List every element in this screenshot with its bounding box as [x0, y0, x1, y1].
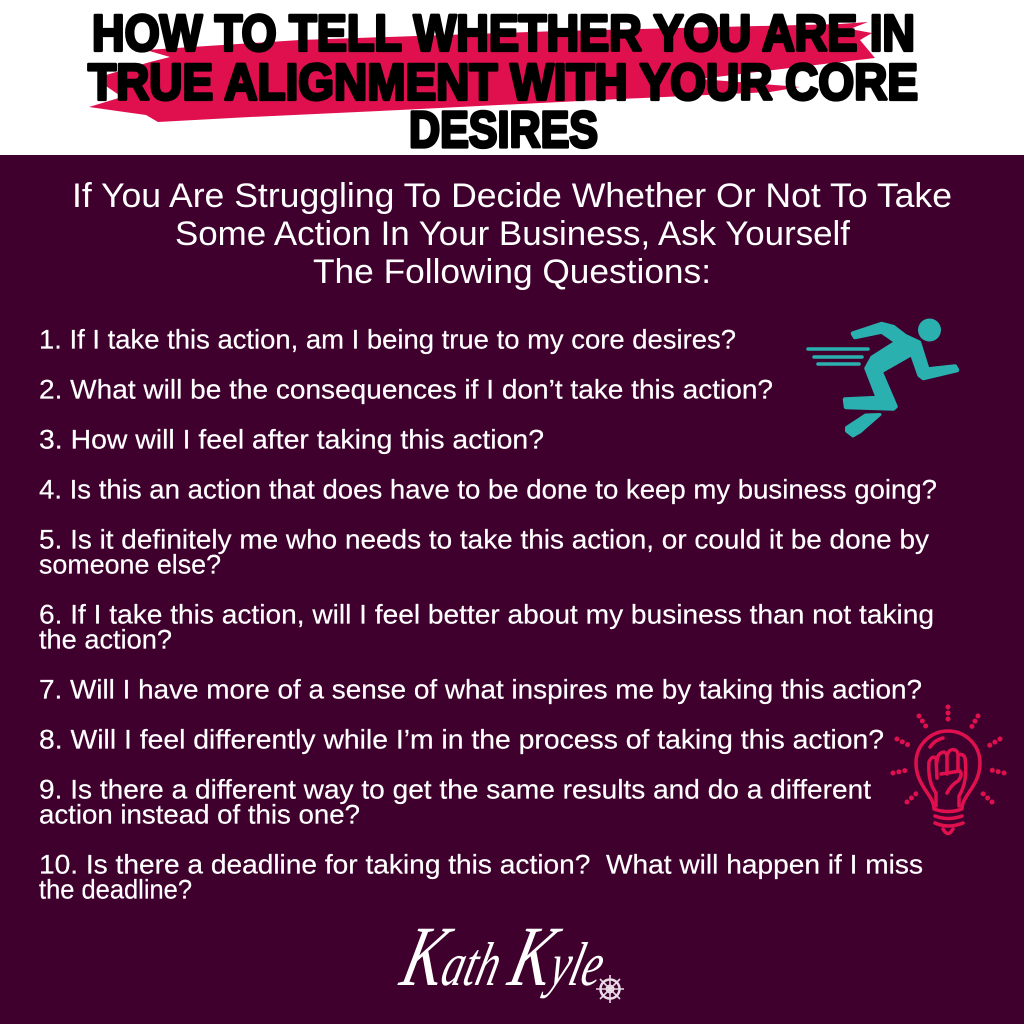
decoration: crimson brush stroke [89, 22, 875, 122]
question 5: someone else? [39, 550, 221, 580]
question 8: 8. Will I feel differently while I’m in the process of taking this action? [39, 724, 884, 754]
question 7: 7. Will I have more of a sense of what inspires me by taking this action? [39, 674, 922, 704]
icon: light bulb with fist [893, 707, 1004, 834]
title [88, 4, 918, 158]
question 10: 10. Is there a deadline for taking this action? What will happen if I miss [39, 850, 923, 880]
question 9 [39, 774, 872, 830]
subtitle [72, 177, 952, 291]
subtitle: Some Action In Your Business, Ask Yourself [175, 215, 851, 253]
question 10 [39, 850, 923, 904]
icon: running person [808, 318, 957, 436]
question 10: the deadline? [39, 874, 192, 904]
icon: dharma wheel [596, 975, 624, 1003]
subtitle: The Following Questions: [313, 253, 711, 291]
question 2: 2. What will be the consequences if I don’t take this action? [39, 374, 773, 404]
question list [39, 324, 937, 904]
question 1: 1. If I take this action, am I being true to my core desires? [39, 324, 736, 354]
question 6: 6. If I take this action, will I feel better about my business than not taking [39, 600, 934, 630]
question 6 [39, 600, 934, 654]
title: TRUE ALIGNMENT WITH YOUR CORE [88, 54, 918, 110]
subtitle: If You Are Struggling To Decide Whether Or Not To Take [72, 177, 952, 215]
signature logo: Kath Kyle [392, 908, 617, 1004]
question 4: 4. Is this an action that does have to be done to keep my business going? [39, 474, 937, 504]
question 5 [39, 524, 930, 580]
question 9: action instead of this one? [39, 800, 360, 830]
title: HOW TO TELL WHETHER YOU ARE IN [92, 4, 915, 62]
question 5: 5. Is it definitely me who needs to take this action, or could it be done by [39, 524, 930, 554]
question 6: the action? [39, 624, 172, 654]
question 3: 3. How will I feel after taking this action? [39, 424, 544, 454]
panel: white header [0, 0, 1024, 155]
title: DESIRES [409, 101, 598, 158]
question 9: 9. Is there a different way to get the same results and do a different [39, 774, 872, 804]
